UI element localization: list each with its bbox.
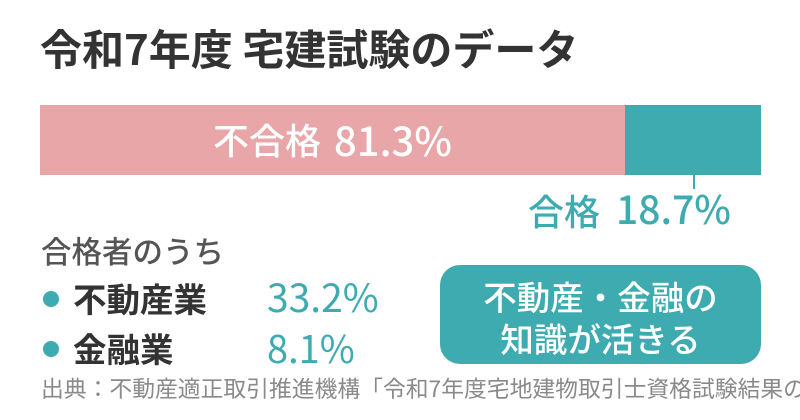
icon: bullet bbox=[43, 291, 59, 307]
value: pass percentage: 18.7% bbox=[616, 180, 731, 236]
list row: finance bbox=[43, 319, 355, 374]
source note: 出典：不動産適正取引推進機構「令和7年度宅地建物取引士資格試験結果の bbox=[41, 371, 800, 404]
callout text line 2: 知識が活きる bbox=[500, 313, 701, 362]
label: fail: 不合格 bbox=[213, 113, 321, 165]
bar segment: fail bbox=[40, 105, 625, 175]
label: pass: 合格 bbox=[528, 184, 600, 236]
callout text line 1: 不動産・金融の bbox=[483, 271, 718, 320]
list row: real estate bbox=[43, 268, 379, 324]
icon: bullet bbox=[43, 341, 59, 357]
label: real estate: 不動産業 bbox=[73, 273, 207, 322]
title: 令和7年度 宅建試験のデータ bbox=[40, 17, 578, 78]
subheading: 合格者のうち bbox=[41, 228, 224, 272]
value: fail percentage: 81.3% bbox=[334, 110, 452, 168]
callout bbox=[440, 265, 761, 364]
label: finance: 金融業 bbox=[73, 323, 174, 372]
leader line bbox=[693, 175, 695, 189]
value: real estate: 33.2% bbox=[267, 268, 379, 324]
value: finance: 8.1% bbox=[267, 319, 355, 374]
stacked bar chart bbox=[40, 105, 761, 175]
bar segment: pass bbox=[625, 105, 761, 175]
